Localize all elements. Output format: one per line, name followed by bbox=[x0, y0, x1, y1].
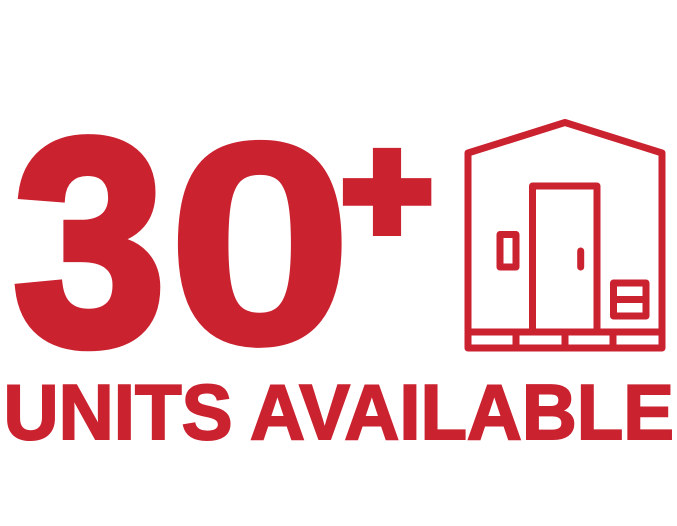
caption: units available bbox=[4, 368, 674, 456]
digit 0: 0 bbox=[167, 83, 353, 405]
window bbox=[500, 234, 516, 267]
door bbox=[532, 186, 597, 332]
floor deck bbox=[468, 332, 662, 348]
house outline with roof bbox=[468, 122, 662, 348]
word: available: AVAILABLE bbox=[250, 368, 674, 456]
digit 3: 3 bbox=[14, 79, 166, 405]
icon: tiny house bbox=[468, 122, 662, 348]
plus sign: + bbox=[342, 106, 432, 276]
word: units: UNITS bbox=[4, 368, 232, 456]
big number: 30+ bbox=[14, 79, 432, 405]
storage box bbox=[614, 283, 646, 316]
door handle bbox=[577, 251, 584, 267]
